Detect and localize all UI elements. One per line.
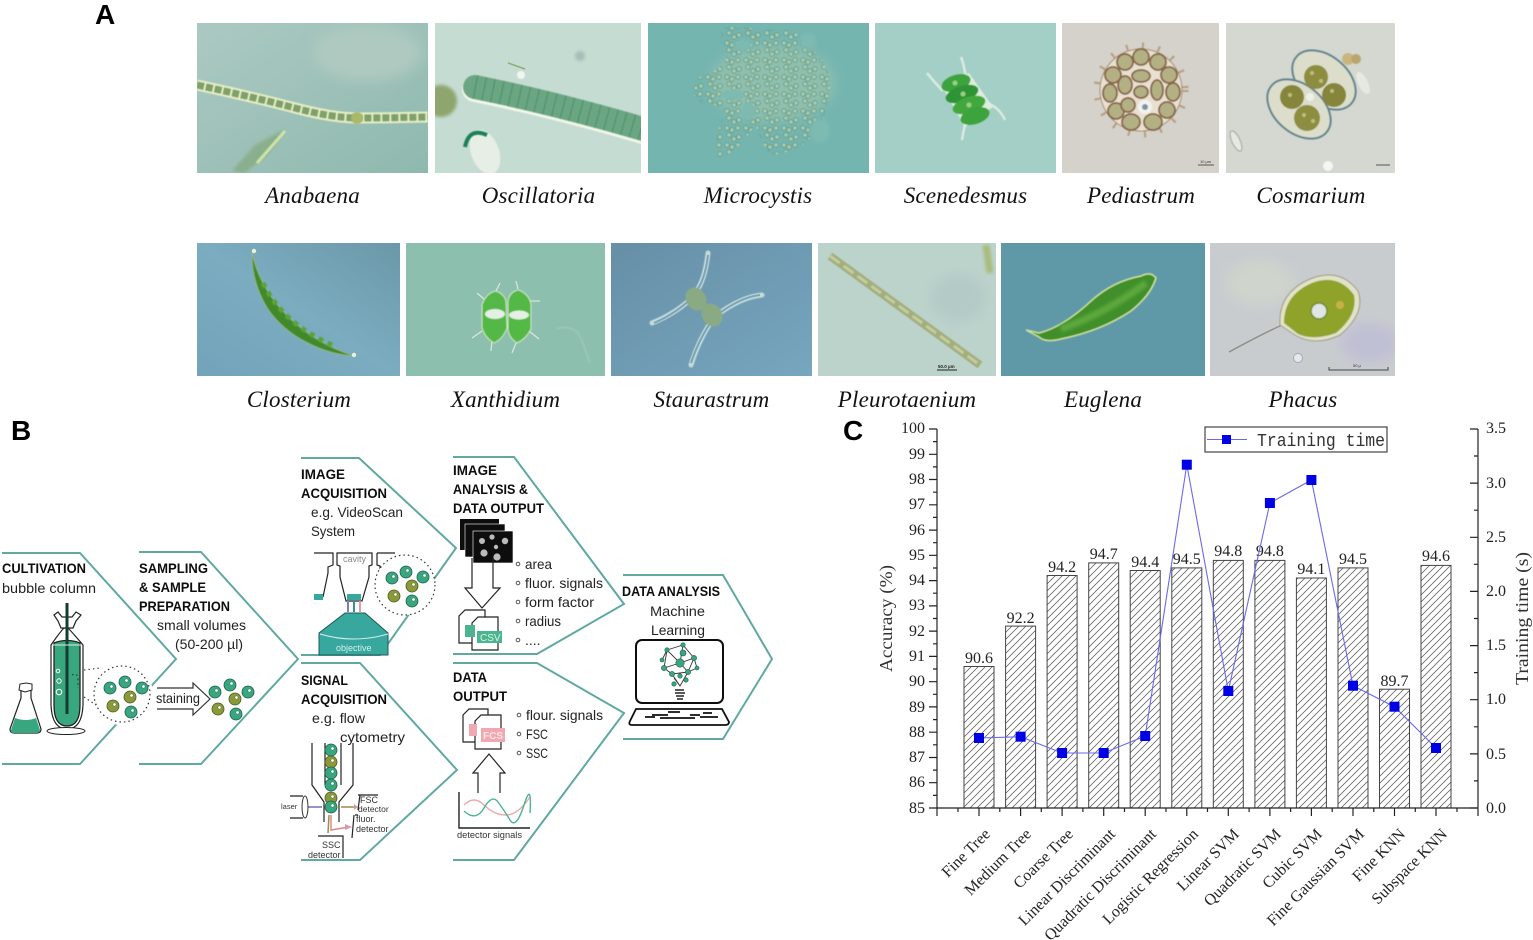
photo: Scenedesmus	[875, 23, 1056, 173]
axis title: accuracy: Accuracy (%)	[876, 565, 897, 672]
left axis labels: 86	[909, 774, 925, 791]
step: cultivation: CULTIVATION	[2, 560, 86, 576]
category labels: Cubic SVM	[1259, 826, 1326, 892]
icon: flow cytometer: detector	[308, 850, 341, 860]
right axis labels: 1.5	[1486, 637, 1506, 654]
icon: CSV files	[459, 610, 502, 650]
step: data output	[453, 663, 624, 860]
bar values: 94.8	[1214, 543, 1242, 560]
category labels: Coarse Tree	[1010, 826, 1077, 892]
magnified cells	[72, 666, 150, 722]
caption: Staurastrum: Staurastrum	[654, 387, 769, 412]
chart: detector signals	[457, 792, 530, 841]
stained cells	[209, 679, 254, 720]
bar values: 94.4	[1131, 554, 1159, 571]
left axis labels: 88	[909, 724, 925, 741]
right axis labels: 3.0	[1486, 475, 1506, 492]
bars	[964, 560, 1451, 808]
step: image analysis and data output: ANALYSIS &	[453, 481, 528, 497]
photo: Phacus	[1210, 243, 1395, 376]
legend: Training time	[1257, 432, 1385, 452]
left axis labels	[901, 420, 925, 817]
step: image analysis and data output: DATA OUTPUT	[453, 500, 544, 516]
bar values: 92.2	[1007, 610, 1035, 627]
list: signals	[517, 707, 603, 761]
right axis labels: 0.5	[1486, 746, 1506, 763]
icon: CSV files: CSV	[480, 633, 501, 644]
magnified cells	[375, 555, 435, 615]
left axis labels: 90	[909, 673, 925, 690]
panel B: workflow	[2, 415, 772, 860]
legend	[1205, 427, 1387, 452]
left axis labels: 98	[909, 471, 925, 488]
right axis labels: 1.0	[1486, 691, 1506, 708]
left axis labels: 93	[909, 597, 925, 614]
step: image acquisition: ACQUISITION	[301, 485, 387, 501]
step: data output: DATA	[453, 669, 487, 685]
icon: microscope objective: objective	[336, 643, 372, 653]
category labels: Fine Tree	[939, 826, 994, 881]
right axis labels: 2.5	[1486, 529, 1506, 546]
list: features: form factor	[525, 594, 594, 610]
step: sampling	[139, 552, 298, 764]
bar values: 94.1	[1297, 561, 1325, 578]
step: signal acquisition	[281, 663, 457, 860]
category labels: Linear Discriminant	[1015, 825, 1119, 929]
photo: Pediastrum: 10 µm	[1200, 159, 1212, 164]
icon: flow cytometer: detector	[358, 804, 389, 814]
step: sampling: (50-200 µl)	[175, 636, 243, 652]
icon: laptop with network bulb	[629, 640, 729, 725]
caption: Euglena: Euglena	[1063, 387, 1142, 412]
list: signals: flour. signals	[526, 707, 603, 723]
icon: bubble column	[47, 603, 85, 734]
step: sampling: SAMPLING	[139, 560, 208, 576]
left axis labels: 92	[909, 623, 925, 640]
photo: Phacus: 50 µ	[1353, 363, 1362, 368]
left axis labels: 89	[909, 699, 925, 716]
icon: flow cytometer: FSC	[360, 795, 379, 805]
photo: Staurastrum	[611, 243, 812, 376]
left axis labels: 95	[909, 547, 925, 564]
icon: FCS files	[463, 709, 505, 749]
category labels: Quadratic SVM	[1201, 826, 1285, 910]
left axis labels: 87	[909, 749, 925, 766]
step: signal acquisition: SIGNAL	[301, 672, 348, 688]
icon: flow cytometer	[281, 743, 389, 860]
label B: B	[11, 415, 31, 446]
list: features: ....	[525, 632, 541, 648]
right axis labels	[1486, 420, 1506, 817]
photo: Cosmarium	[1226, 23, 1395, 173]
step: data analysis: DATA ANALYSIS	[622, 583, 720, 599]
step: data output: OUTPUT	[453, 688, 507, 704]
step: image analysis and data output: IMAGE	[453, 462, 497, 478]
chart: detector signals: detector signals	[457, 830, 522, 841]
step: data analysis: Learning	[651, 622, 705, 638]
step: sampling: small volumes	[157, 617, 246, 633]
step: image analysis and data output	[453, 457, 624, 654]
category labels: Subspace KNN	[1369, 825, 1451, 908]
step: sampling: & SAMPLE	[139, 579, 206, 595]
icon: flow cytometer: fluor.	[356, 814, 376, 824]
icon: flow cytometer: detector	[356, 824, 389, 834]
left axis labels: 97	[909, 496, 925, 513]
icon: microscope objective: cavity	[343, 554, 367, 564]
caption: Anabaena: Anabaena	[263, 183, 360, 208]
caption: Xanthidium: Xanthidium	[450, 387, 560, 412]
list: features: radius	[525, 613, 561, 629]
caption: Pediastrum: Pediastrum	[1086, 183, 1195, 208]
photo: Oscillatoria	[435, 23, 641, 173]
icon: flask	[10, 683, 41, 733]
right axis labels: 3.5	[1486, 420, 1506, 437]
step: image acquisition: System	[311, 523, 355, 539]
bar values: 89.7	[1380, 673, 1408, 690]
caption: Pleurotaenium: Pleurotaenium	[837, 387, 976, 412]
category labels: Logistic Regression	[1100, 826, 1202, 928]
bar values: 94.7	[1090, 546, 1118, 563]
caption: Phacus: Phacus	[1268, 387, 1337, 412]
axes	[929, 429, 1478, 816]
step: cultivation: bubble column	[2, 580, 96, 596]
left axis labels: 85	[909, 800, 925, 817]
bar values: 94.5	[1339, 551, 1367, 568]
line: training time	[974, 460, 1441, 758]
photo: Anabaena	[197, 23, 428, 173]
category labels	[939, 825, 1451, 940]
step: data analysis: Machine	[650, 603, 705, 619]
step: signal acquisition: cytometry	[340, 729, 405, 745]
list: signals: FSC	[526, 726, 548, 742]
caption: Scenedesmus: Scenedesmus	[904, 183, 1027, 208]
caption: Oscillatoria: Oscillatoria	[482, 183, 595, 208]
step: image acquisition	[301, 458, 456, 655]
right axis labels: 0.0	[1486, 800, 1506, 817]
photo: Pediastrum	[1062, 23, 1219, 173]
list: features	[516, 556, 603, 648]
icon: flow cytometer: SSC	[322, 840, 341, 850]
label C: C	[843, 415, 863, 446]
left axis labels: 100	[901, 420, 925, 437]
icon: FCS files: FCS	[483, 731, 503, 742]
panel A: algae micrographs	[95, 0, 1400, 412]
caption: Microcystis: Microcystis	[703, 183, 812, 208]
arrow: down	[465, 558, 500, 608]
bar values: 94.5	[1173, 551, 1201, 568]
list: features: fluor. signals	[525, 575, 603, 591]
photo: Euglena	[1001, 243, 1205, 376]
category labels: Fine KNN	[1349, 825, 1409, 885]
arrow: up	[473, 754, 505, 793]
left axis labels: 99	[909, 446, 925, 463]
axis title: training time: Training time (s)	[1512, 552, 1533, 685]
bar values: 94.8	[1256, 543, 1284, 560]
icon: image stack	[460, 519, 513, 563]
arrow: staining: staining	[156, 690, 200, 706]
arrow: staining	[156, 683, 210, 715]
photo: Pleurotaenium	[818, 243, 996, 376]
icon: microscope objective	[314, 553, 395, 655]
step: sampling: PREPARATION	[139, 598, 230, 614]
step: data analysis	[622, 575, 772, 739]
caption: Cosmarium: Cosmarium	[1256, 183, 1366, 208]
bar values: 90.6	[965, 650, 993, 667]
photo: Xanthidium	[406, 243, 605, 376]
caption: Closterium: Closterium	[247, 387, 351, 412]
list: signals: SSC	[526, 745, 548, 761]
bar values	[965, 543, 1450, 690]
photo: Microcystis	[648, 23, 869, 173]
step: signal acquisition: ACQUISITION	[301, 691, 387, 707]
step: signal acquisition: e.g. flow	[312, 710, 366, 726]
bar values: 94.6	[1422, 548, 1450, 565]
category labels: Linear SVM	[1174, 826, 1243, 895]
left axis labels: 91	[909, 648, 925, 665]
panel C: accuracy and training time chart	[843, 415, 1533, 940]
left axis labels: 94	[909, 572, 925, 589]
category labels: Fine Gaussian SVM	[1264, 826, 1368, 930]
list: features: area	[525, 556, 552, 572]
step: image acquisition: e.g. VideoScan	[311, 504, 403, 520]
right axis labels: 2.0	[1486, 583, 1506, 600]
photo: Pleurotaenium: 50.0 µm	[938, 364, 955, 369]
left axis labels: 96	[909, 522, 925, 539]
bar values: 94.2	[1048, 559, 1076, 576]
category labels: Medium Tree	[962, 826, 1035, 899]
step: cultivation	[2, 553, 176, 764]
step: image acquisition: IMAGE	[301, 466, 345, 482]
photo: Closterium	[197, 243, 400, 376]
icon: flow cytometer: laser	[281, 802, 298, 811]
